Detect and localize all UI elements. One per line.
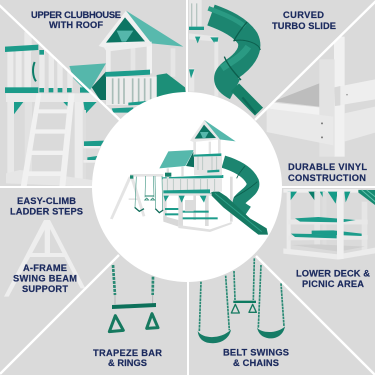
straight slide (209, 190, 268, 235)
panel: curved turbo slide (189, 0, 260, 113)
heading: belt swings and chains: & CHAINS (233, 358, 279, 368)
heading: belt swings and chains: BELT SWINGS (223, 348, 289, 358)
top roof (204, 120, 236, 141)
lower deck rail (162, 175, 223, 179)
heading: curved turbo slide: TURBO SLIDE (272, 21, 336, 31)
heading: curved turbo slide (272, 10, 336, 31)
heading: upper clubhouse: UPPER CLUBHOUSE (31, 10, 121, 20)
heading: trapeze bar and rings: TRAPEZE BAR (93, 348, 162, 358)
panel: belt swings and chains (198, 258, 285, 343)
heading: trapeze bar and rings: & RINGS (108, 358, 147, 368)
heading: lower deck and picnic area: PICNIC AREA (302, 279, 364, 289)
heading: trapeze bar and rings (93, 348, 162, 368)
swing frame (110, 174, 163, 219)
heading: lower deck and picnic area (296, 268, 370, 289)
upper tower (193, 139, 222, 175)
heading: durable vinyl construction: DURABLE VINYL (288, 162, 367, 172)
second roof (186, 152, 195, 167)
panel: durable vinyl construction (267, 37, 375, 157)
heading: belt swings and chains (223, 348, 289, 368)
heading: easy-climb ladder steps (10, 196, 83, 216)
central playset image (110, 120, 268, 235)
heading: upper clubhouse (31, 10, 121, 30)
panel: lower deck and picnic area (283, 189, 375, 260)
heading: a-frame swing beam support: SWING BEAM (13, 274, 77, 284)
central circle (92, 92, 282, 282)
heading: a-frame swing beam support: SUPPORT (22, 284, 68, 294)
panel: easy-climb ladder steps (5, 32, 104, 187)
heading: a-frame swing beam support: A-FRAME (23, 263, 67, 273)
panel: trapeze bar and rings (109, 265, 158, 332)
heading: upper clubhouse: WITH ROOF (49, 20, 103, 30)
heading: durable vinyl construction: CONSTRUCTION (288, 173, 366, 183)
lower posts (163, 177, 233, 227)
heading: easy-climb ladder steps: EASY-CLIMB (17, 196, 76, 206)
swings (135, 176, 163, 210)
lower teal seats (163, 195, 218, 219)
heading: lower deck and picnic area: LOWER DECK & (296, 268, 370, 278)
panel: a-frame swing beam support (4, 220, 85, 297)
panel: upper clubhouse with roof (69, 11, 187, 113)
heading: easy-climb ladder steps: LADDER STEPS (10, 206, 83, 216)
heading: curved turbo slide: CURVED (283, 10, 324, 20)
spiral slide (223, 162, 253, 212)
heading: durable vinyl construction (288, 162, 367, 183)
heading: a-frame swing beam support (13, 263, 77, 294)
